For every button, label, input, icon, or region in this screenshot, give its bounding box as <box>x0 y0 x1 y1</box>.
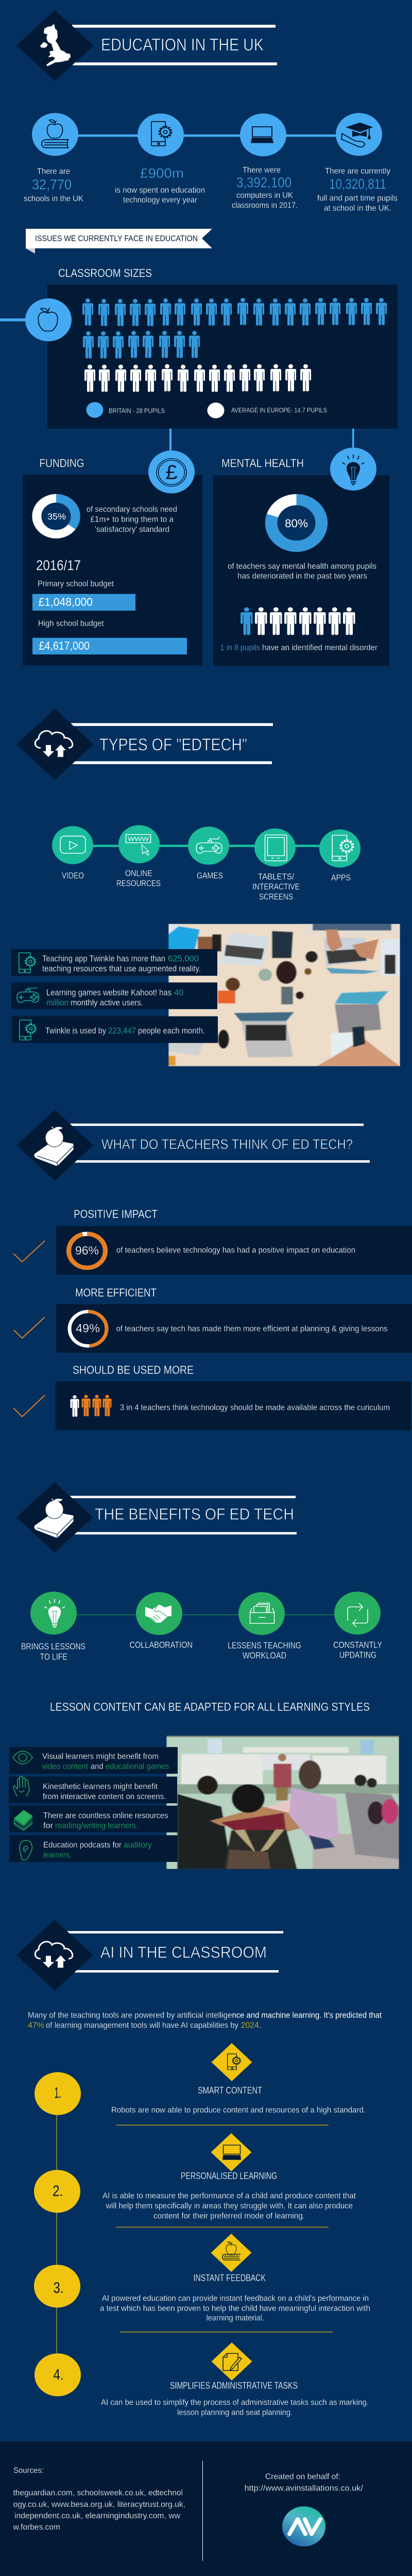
step 1: 1. <box>55 2084 61 2102</box>
icon: hand <box>13 1776 29 1797</box>
callout: Twinkle resources: Teaching app Twinkle has more than <box>42 954 165 963</box>
ring chart: 96% <box>69 1234 105 1268</box>
text: mental health stat: of teachers say mental health among pupils <box>228 562 376 571</box>
icon: light bulb <box>330 448 376 490</box>
icon: phone with gear <box>332 835 353 861</box>
step 2: 2. <box>53 2182 63 2199</box>
item: instant feedback <box>100 2234 370 2332</box>
section header: what do teachers think <box>16 1110 370 1181</box>
section header: types of edtech <box>16 709 273 780</box>
stat: schools: schools in the UK <box>24 194 83 203</box>
section header: education in the UK <box>16 10 277 81</box>
benefit labels: CONSTANTLY <box>333 1639 382 1650</box>
edtech labels: VIDEO <box>62 871 84 880</box>
icon: apple on book <box>34 1499 74 1538</box>
panel: mental health <box>213 448 389 666</box>
callout: Twinkle monthly users: Twinkle is used by <box>45 1026 106 1036</box>
timeline: numbered AI steps <box>34 2072 81 2396</box>
text: AI intro: nce and machine learning. It's predicted that <box>232 2011 382 2020</box>
benefit labels: TO LIFE <box>40 1651 67 1662</box>
benefit labels: WORKLOAD <box>243 1650 286 1660</box>
callout: reading and writing learners: There are countless online resources <box>43 1811 168 1820</box>
donut chart: 35% <box>37 498 76 534</box>
panel: positive impact <box>56 1226 412 1275</box>
icon: tablet <box>265 835 287 861</box>
callout: kinesthetic learners <box>9 1776 177 1803</box>
timeline: UK education stats icons <box>32 113 382 156</box>
stat: pupils: full and part time pupils <box>317 194 398 202</box>
credit: Created on behalf of: <box>265 2472 340 2481</box>
icon: cloud up and down <box>35 1942 73 1968</box>
item: instant feedback: INSTANT FEEDBACK <box>193 2273 266 2283</box>
bar: primary budget <box>32 594 135 611</box>
stat: schools: There are <box>37 167 70 176</box>
step 2 <box>34 2170 80 2213</box>
benefit labels: LESSENS TEACHING <box>228 1640 301 1650</box>
stat: pupils <box>317 166 398 213</box>
callout: visual learners <box>9 1747 178 1774</box>
callout: Kahoot users: 40 <box>174 988 183 997</box>
callout: Twinkle monthly users: 223,447 <box>108 1026 136 1036</box>
callout: visual learners: and <box>91 1762 104 1771</box>
heading: classroom sizes: CLASSROOM SIZES <box>58 266 152 279</box>
callout: auditory learners: learners. <box>43 1851 72 1860</box>
item: simplifies administrative tasks <box>101 2343 369 2417</box>
icon: phone with gear <box>20 1020 36 1040</box>
callout: Kahoot users: million <box>46 997 68 1007</box>
callout: Twinkle resources: 625,000 <box>168 954 199 963</box>
icon: document and pencil <box>223 2353 242 2370</box>
callout: reading and writing learners: reading/writing learners. <box>55 1821 138 1830</box>
heading: funding: FUNDING <box>39 457 84 470</box>
panel: more efficient <box>56 1304 412 1353</box>
icon: phone with gear <box>19 953 35 973</box>
item: simplifies administrative tasks: SIMPLIFIES ADMINISTRATIVE TASKS <box>170 2381 298 2391</box>
connector lines <box>0 318 354 452</box>
icon: laptop <box>222 2145 241 2160</box>
item: personalised learning: AI is able to measure the performance of a child and produce content that <box>102 2192 356 2200</box>
heading: should be used more: SHOULD BE USED MORE <box>73 1363 194 1376</box>
benefit labels: BRINGS LESSONS <box>21 1641 85 1651</box>
stat: spend: is now spent on education <box>115 185 205 195</box>
ring chart: 96%: 96% <box>75 1244 99 1258</box>
edtech labels: TABLETS/ <box>258 872 294 882</box>
text: 1 in 8 pupils: 1 in 8 pupils <box>220 643 260 652</box>
sources: Sources: <box>13 2466 44 2475</box>
donut chart: 80%: 80% <box>285 517 308 530</box>
sources: ogy.co.uk, www.besa.org.uk, literacytrust.org.uk, <box>13 2500 185 2509</box>
edtech labels: RESOURCES <box>116 878 161 888</box>
icon: pound coin: £ <box>165 461 178 484</box>
pictogram: Europe 14.7 pupils <box>84 364 311 392</box>
callout: Kahoot users: Learning games website Kahoot! has <box>46 988 171 997</box>
ribbon: issues heading: ISSUES WE CURRENTLY FACE IN EDUCATION <box>35 234 198 243</box>
panel: funding <box>23 450 202 666</box>
item: personalised learning: content for their preferred mode of learning. <box>153 2212 305 2221</box>
section header: AI in the classroom <box>16 1920 283 1991</box>
photo: classroom <box>166 1736 399 1869</box>
label: high school budget: High school budget <box>38 619 104 628</box>
callout: Kahoot users: monthly active users. <box>71 997 143 1007</box>
callout: auditory learners: Education podcasts for <box>43 1841 122 1850</box>
stat: pupils: at school in the UK. <box>324 204 391 213</box>
heading: THE BENEFITS OF ED TECH <box>95 1505 294 1523</box>
text: AI intro <box>28 2011 382 2030</box>
text: mental health stat: has deteriorated in the past two years <box>237 572 367 581</box>
item: simplifies administrative tasks: AI can be used to simplify the process of administrative tasks such as marking. <box>101 2398 369 2407</box>
callout: visual learners: video content <box>42 1762 88 1771</box>
callout: auditory learners <box>9 1835 178 1862</box>
check mark <box>13 1241 45 1262</box>
step 4 <box>35 2353 81 2396</box>
edtech labels: GAMES <box>197 871 223 880</box>
item: personalised learning <box>102 2133 356 2227</box>
text: AI intro: 2024 <box>241 2021 259 2030</box>
text: AI intro: of learning management tools will have AI capabilities by <box>46 2021 239 2030</box>
icon: loop arrows <box>348 1603 368 1627</box>
text: 1 in 8 pupils: have an identified mental disorder <box>262 643 377 652</box>
stat: computers <box>232 165 298 210</box>
ribbon: issues heading <box>26 229 212 253</box>
text: secondary schools: £1m+ to bring them to a <box>91 515 174 524</box>
icon: apple on book <box>222 2242 241 2260</box>
benefit labels: COLLABORATION <box>130 1639 193 1650</box>
icon: game controller <box>17 988 39 1003</box>
stat: computers: 3,392,100 <box>236 175 291 191</box>
text: secondary schools <box>87 505 177 534</box>
icon: drawer of files <box>250 1603 274 1623</box>
heading: more efficient: MORE EFFICIENT <box>75 1286 157 1299</box>
icon: video <box>60 836 85 853</box>
heading: mental health: MENTAL HEALTH <box>221 457 304 470</box>
icon: books <box>14 1810 32 1831</box>
callout: Twinkle monthly users <box>12 1016 218 1043</box>
callout: Twinkle resources <box>11 949 217 976</box>
sources <box>13 2466 185 2532</box>
text: secondary schools: of secondary schools need <box>87 505 177 514</box>
callout: visual learners: educational games <box>106 1762 169 1771</box>
icon: phone with gear <box>228 2054 241 2070</box>
stat: schools: 32,770 <box>32 177 72 193</box>
icon: handshake <box>145 1604 171 1623</box>
heading: TYPES OF "EDTECH" <box>99 736 247 754</box>
check mark <box>13 1317 45 1338</box>
step 1 <box>35 2072 81 2115</box>
icon: phone with gear <box>151 122 171 146</box>
stat: spend: technology every year <box>123 196 197 205</box>
edtech labels: APPS <box>331 873 351 883</box>
icon: UK map <box>40 24 71 66</box>
step 4: 4. <box>53 2366 63 2383</box>
callout: reading and writing learners <box>9 1806 178 1833</box>
text: mental health stat <box>228 562 376 581</box>
callout: Twinkle resources: teaching resources that use augmented reality. <box>42 963 201 973</box>
edtech labels: INTERACTIVE <box>252 882 300 891</box>
heading: positive impact: POSITIVE IMPACT <box>74 1208 158 1221</box>
sources: w.forbes.com <box>13 2523 60 2532</box>
stat: computers: classrooms in 2017. <box>232 201 298 210</box>
item: smart content: Robots are now able to produce content and resources of a high standard. <box>111 2106 366 2115</box>
label: primary budget: Primary school budget <box>38 580 114 588</box>
icon: apple on book <box>34 1127 74 1166</box>
section header: the benefits of ed tech <box>16 1482 297 1553</box>
icon: www cursor: WWW <box>128 836 149 842</box>
pictogram: Britain 28 pupils <box>82 298 387 359</box>
icon: laptop <box>251 127 273 143</box>
callout: reading and writing learners: for <box>43 1821 54 1830</box>
bar: primary budget: £1,048,000 <box>38 596 93 608</box>
benefit labels: UPDATING <box>339 1650 376 1660</box>
benefit labels <box>21 1639 382 1662</box>
icon: apple on book <box>42 120 69 148</box>
icon: www cursor <box>126 835 150 855</box>
footer <box>0 2442 412 2576</box>
bar: high school budget: £4,617,000 <box>39 639 90 652</box>
donut chart: 35%: 35% <box>47 511 66 521</box>
step 3 <box>34 2265 80 2308</box>
item: instant feedback: a test which has been proven to help the child have meaningful interaction with <box>100 2304 370 2313</box>
logo: AV <box>282 2506 325 2547</box>
pictogram: 1 in 8 <box>241 607 355 635</box>
icon: light bulb <box>44 1599 65 1628</box>
text: AI intro: . <box>259 2021 262 2030</box>
photo: desks with laptops <box>168 924 400 1066</box>
stat: spend: £900m <box>140 166 184 181</box>
icon: graduation cap and scroll <box>341 123 373 147</box>
legend: BRITAIN - 28 PUPILS <box>109 407 165 414</box>
year heading: 2016/17 <box>36 558 81 573</box>
icon: pound coin <box>148 450 195 494</box>
icon: game controller <box>196 837 222 853</box>
callout: Kahoot users <box>11 982 217 1009</box>
item: smart content: SMART CONTENT <box>198 2086 262 2096</box>
timeline: types of edtech <box>52 825 360 868</box>
bar: high school budget <box>32 638 187 654</box>
edtech labels: ONLINE <box>125 868 152 878</box>
stat: schools <box>24 167 83 203</box>
text: AI intro: 47% <box>28 2021 44 2030</box>
heading: AI IN THE CLASSROOM <box>100 1943 267 1961</box>
legend <box>87 402 327 418</box>
ring chart: 49%: 49% <box>76 1322 100 1335</box>
item: personalised learning: PERSONALISED LEARNING <box>181 2171 277 2181</box>
sources: independent.co.uk, elearningindustry.com, ww <box>14 2512 180 2520</box>
item: simplifies administrative tasks: lesson planning and seat planning. <box>177 2408 293 2417</box>
icon: cloud up and down <box>35 731 73 757</box>
sources: theguardian.com, schoolsweek.co.uk, edtechnol <box>13 2488 183 2497</box>
edtech labels: SCREENS <box>259 892 293 902</box>
stat: pupils: 10,320,811 <box>329 176 386 192</box>
icon: apple circle <box>25 298 72 341</box>
heading: EDUCATION IN THE UK <box>101 36 264 55</box>
callout: kinesthetic learners: Kinesthetic learners might benefit <box>43 1782 158 1791</box>
stat: computers: There were <box>243 165 281 175</box>
panel: should be used more <box>56 1381 411 1430</box>
panel: positive impact: of teachers believe technology has had a positive impact on education <box>116 1246 355 1255</box>
text: 1 in 8 pupils <box>220 643 377 652</box>
check mark <box>13 1395 45 1417</box>
icon: ear <box>20 1840 32 1860</box>
text: AI intro: Many of the teaching tools are powered by artificial intellige <box>28 2011 232 2020</box>
stat: computers: computers in UK <box>236 191 293 200</box>
heading: WHAT DO TEACHERS THINK OF ED TECH? <box>101 1137 353 1152</box>
pictogram: 3 in 4 <box>70 1395 112 1417</box>
callout: kinesthetic learners: from interactive content on screens. <box>43 1792 166 1801</box>
legend: AVERAGE IN EUROPE- 14.7 PUPILS <box>231 406 327 414</box>
item: instant feedback: AI powered education can provide instant feedback on a child's performance in <box>102 2294 369 2303</box>
timeline: benefits <box>30 1591 381 1635</box>
item: smart content <box>111 2043 366 2125</box>
item: personalised learning: will help them specifically in areas they struggle with. It can also produce <box>106 2201 353 2210</box>
callout: Twinkle monthly users: people each month. <box>138 1026 205 1036</box>
stat: spend <box>115 166 205 205</box>
donut chart: 80% <box>271 500 321 546</box>
step 3: 3. <box>53 2279 63 2296</box>
text: secondary schools: 'satisfactory' standard <box>95 525 169 534</box>
panel: classroom sizes <box>25 284 398 429</box>
ring chart: 49% <box>70 1312 107 1346</box>
callout: auditory learners: auditory <box>124 1841 152 1850</box>
item: instant feedback: learning material. <box>206 2314 264 2323</box>
credit <box>244 2472 363 2493</box>
icon: eye <box>13 1751 32 1764</box>
credit: http://www.avinstallations.co.uk/ <box>244 2484 363 2493</box>
stat: pupils: There are currently <box>325 166 391 176</box>
callout: visual learners: Visual learners might benefit from <box>42 1752 159 1761</box>
edtech labels <box>62 868 351 902</box>
